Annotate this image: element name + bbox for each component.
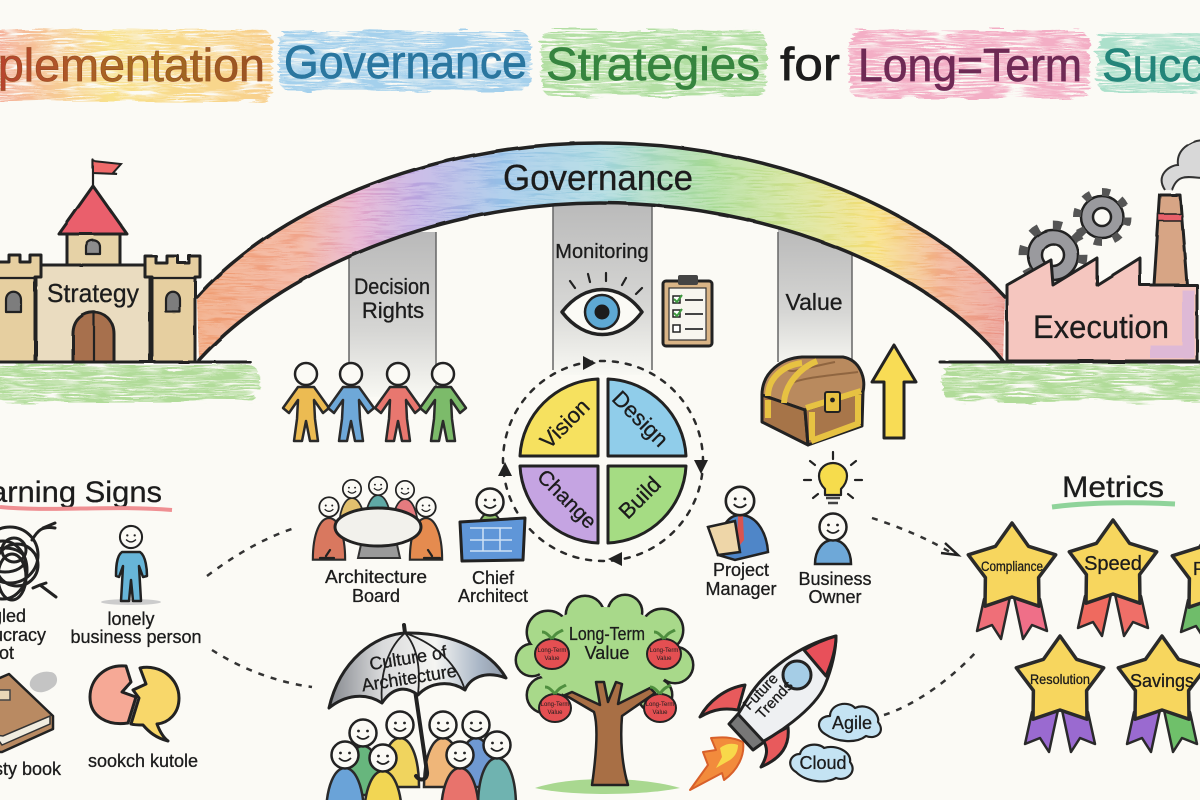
apples: Long-Term (646, 702, 674, 708)
dashed connector: warning signs to board (207, 527, 298, 576)
cloud: cloud: Cloud (799, 753, 847, 773)
pillar: decision rights (349, 232, 436, 397)
architecture board (313, 477, 442, 606)
apples (535, 630, 681, 722)
title text: governance: Governance (284, 36, 527, 88)
rocket label: Future (740, 670, 782, 714)
rocket body (733, 636, 836, 745)
title colour band: success (1097, 33, 1200, 93)
tangled label (0, 606, 46, 663)
crowd back row (344, 712, 516, 800)
apples: Long-Term (538, 648, 566, 654)
person: blue (328, 363, 374, 441)
pillar: value (778, 228, 852, 368)
dashed cycle ring (503, 361, 703, 561)
lonely label (70, 609, 202, 647)
rocket label (740, 670, 797, 723)
quadrant: build (608, 466, 686, 543)
board label (325, 567, 427, 606)
pillar: monitoring (553, 200, 652, 375)
dashed arrow: business owner to metrics (872, 518, 958, 555)
person: red (375, 363, 421, 441)
manager label (705, 560, 777, 599)
table (320, 508, 440, 558)
icon: eye (562, 273, 642, 334)
pillar label: Value (785, 289, 843, 315)
title text: strategies: Strategies (546, 38, 760, 90)
icon: broken speech bubble (90, 666, 179, 741)
icon: yellow up arrow (872, 345, 916, 438)
nose cone (804, 636, 836, 676)
icon: lonely person (101, 526, 161, 605)
owner label: Owner (808, 587, 862, 607)
badge: clipped metric (1172, 524, 1200, 640)
person: green (420, 363, 466, 441)
lonely label: lonely (107, 609, 155, 629)
umbrella label (360, 642, 458, 695)
factory label: Execution (1033, 309, 1169, 345)
title (0, 29, 1200, 101)
flame (690, 737, 743, 790)
rocket label: Trends (753, 677, 797, 723)
icon: tangled scribble (0, 523, 56, 600)
ground: execution side (942, 364, 1200, 402)
dashed connector: rocket to metrics (884, 652, 976, 715)
arch label: Governance (503, 157, 693, 198)
heading underline (0, 507, 172, 510)
grass (535, 779, 680, 794)
title text: long-term: Long=Term (858, 39, 1082, 91)
garbled bubble label: sookch kutole (88, 751, 198, 771)
manager label: Project (713, 560, 769, 580)
governance rainbow arch (197, 143, 1005, 361)
tree label (569, 624, 645, 663)
owner label (798, 569, 872, 607)
people holding hands (283, 363, 466, 441)
badge: resolution (1016, 636, 1104, 752)
icon: umbrella (329, 625, 506, 779)
cloud: agile (819, 704, 881, 741)
owner label: Business (798, 569, 872, 589)
title text: for: for (780, 38, 840, 90)
manager label: Manager (705, 579, 777, 599)
culture of architecture (326, 625, 516, 800)
heading underline (1052, 503, 1175, 507)
cloud: agile: Agile (832, 713, 872, 733)
badge: speed (1069, 520, 1157, 636)
board label: Board (352, 586, 400, 606)
badge: savings: Savings (1130, 671, 1194, 691)
dashed connector: warning signs to culture (212, 650, 312, 687)
apples: Long-Term (650, 648, 678, 654)
quadrant: change: Change (532, 465, 601, 534)
umbrella label: Culture of (368, 642, 449, 674)
chief label: Architect (458, 586, 528, 606)
apples: Value (545, 656, 560, 662)
quadrant: design: Design (607, 386, 673, 452)
porthole (783, 661, 811, 689)
project manager (705, 487, 777, 599)
badge: compliance: Compliance (981, 559, 1043, 574)
board label: Architecture (325, 567, 427, 587)
apples: Long-Term (541, 702, 569, 708)
cloud: cloud (790, 745, 853, 781)
ground: strategy side (0, 364, 260, 402)
icon: light bulb (804, 452, 862, 503)
chief label (458, 568, 528, 606)
long-term value tree (517, 596, 692, 794)
rocket: future trends (690, 636, 836, 790)
chief architect (458, 488, 528, 606)
trunk (565, 682, 655, 785)
metrics section (968, 471, 1200, 752)
castle: strategy (0, 160, 250, 362)
pillar label: Monitoring (555, 241, 649, 263)
title colour band: implementation (0, 29, 272, 101)
badge: speed: Speed (1084, 553, 1142, 575)
seated members (313, 477, 442, 560)
badge: compliance (968, 523, 1056, 639)
quadrant: build: Build (614, 472, 666, 524)
business owner (798, 452, 872, 607)
chief label: Chief (472, 568, 515, 588)
nozzle (729, 714, 764, 750)
apples: Value (548, 710, 563, 716)
icon: dusty book (0, 672, 57, 752)
umbrella label: Architecture (360, 661, 458, 695)
lifecycle wheel (498, 356, 708, 566)
crown (517, 596, 692, 712)
crowd front row (326, 742, 479, 800)
icon: treasure chest (762, 357, 864, 445)
lonely label: business person (70, 627, 202, 647)
castle label: Strategy (47, 278, 139, 308)
title colour band: governance (279, 31, 530, 91)
quadrant: vision (520, 379, 598, 456)
warning signs section (0, 476, 202, 779)
pillar label: Decision (354, 274, 430, 299)
badge: resolution: Resolution (1030, 671, 1090, 687)
apples: Value (657, 656, 672, 662)
fins (700, 685, 788, 767)
quadrant: vision: Vision (535, 394, 595, 454)
person: yellow (283, 363, 329, 441)
pillar label: rights: Rights (362, 298, 424, 323)
title colour band: long-term (849, 30, 1089, 98)
factory: execution (940, 140, 1200, 362)
ring arrowheads (498, 356, 708, 566)
badge: savings (1118, 636, 1200, 752)
tree label: Value (585, 643, 629, 663)
tree label: Long-Term (569, 624, 645, 644)
title colour band: strategies (541, 30, 766, 96)
heading: Metrics (1062, 471, 1164, 504)
icon: clipboard checklist (663, 275, 712, 346)
apples: Value (653, 710, 668, 716)
